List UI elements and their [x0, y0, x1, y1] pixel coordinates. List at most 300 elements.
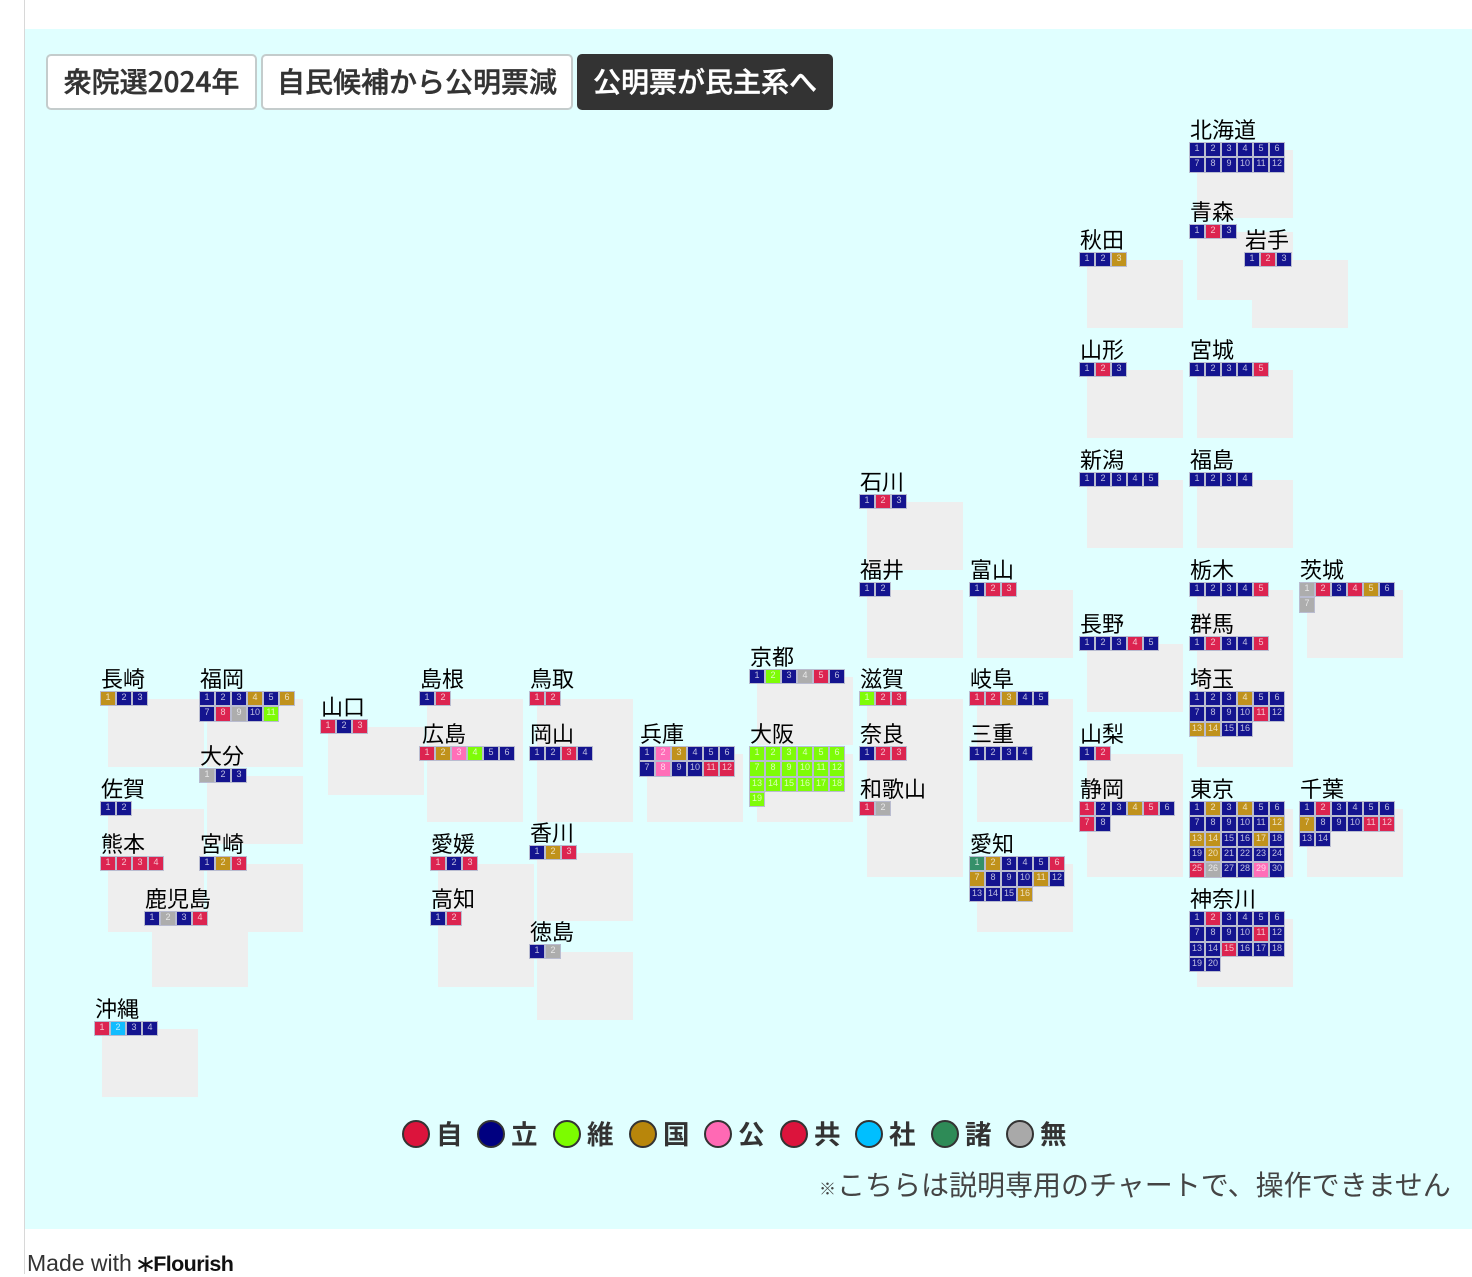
prefecture: 新潟: 3: [1116, 473, 1122, 483]
prefecture: 兵庫: 3: [676, 747, 682, 757]
prefecture: 滋賀: [859, 662, 963, 754]
prefecture: 京都: 5: [818, 670, 824, 680]
prefecture: 徳島: [529, 915, 633, 1020]
prefecture: 富山: 2: [990, 583, 996, 593]
prefecture: 神奈川: 15: [1224, 943, 1234, 953]
prefecture: 千葉: 4: [1352, 802, 1358, 812]
prefecture: 東京: 11: [1256, 817, 1266, 827]
prefecture: 東京: 23: [1256, 848, 1266, 858]
prefecture: 栃木: 2: [1210, 583, 1216, 593]
prefecture: 福岡: [199, 665, 303, 767]
prefecture: 兵庫: 5: [708, 747, 714, 757]
prefecture: 宮崎: 1: [204, 857, 210, 867]
legend: 国: 国: [663, 1113, 690, 1152]
prefecture: 茨城: 3: [1336, 583, 1342, 593]
prefecture: 福島: 4: [1242, 473, 1248, 483]
prefecture: 広島: 広島: [422, 717, 466, 749]
prefecture: 東京: 24: [1272, 848, 1282, 858]
prefecture: 北海道: 8: [1210, 158, 1216, 168]
prefecture: 大阪: 17: [816, 778, 826, 788]
prefecture: 岡山: 1: [534, 747, 540, 757]
prefecture: 福岡: 10: [250, 707, 260, 717]
prefecture: 北海道: 6: [1274, 143, 1280, 153]
prefecture: 秋田: 2: [1100, 253, 1106, 263]
prefecture: 神奈川: 18: [1272, 943, 1282, 953]
prefecture: 熊本: 3: [137, 857, 142, 867]
prefecture: 埼玉: 埼玉: [1190, 662, 1234, 694]
legend: 公: 公: [738, 1113, 764, 1152]
prefecture: 埼玉: 4: [1242, 692, 1248, 702]
prefecture: 大阪: 10: [800, 762, 810, 772]
prefecture: 福岡: 5: [268, 692, 274, 702]
prefecture: 岡山: 2: [550, 747, 556, 757]
prefecture: 東京: 18: [1272, 833, 1282, 843]
prefecture: 鹿児島: 鹿児島: [145, 882, 211, 914]
prefecture: 神奈川: 10: [1240, 927, 1250, 937]
prefecture: 埼玉: 7: [1194, 707, 1200, 717]
prefecture: 香川: 2: [550, 846, 556, 856]
prefecture: 神奈川: 9: [1226, 927, 1232, 937]
prefecture: 福島: 福島: [1190, 443, 1234, 475]
prefecture: 愛媛: 3: [467, 857, 472, 867]
prefecture: 群馬: 2: [1210, 637, 1216, 647]
prefecture: 群馬: 5: [1258, 637, 1264, 647]
prefecture: 神奈川: 7: [1194, 927, 1200, 937]
legend: 共: 共: [814, 1113, 840, 1152]
prefecture: 宮城: 4: [1242, 363, 1248, 373]
prefecture: 岡山: 3: [566, 747, 572, 757]
prefecture: 北海道: 1: [1194, 143, 1200, 153]
prefecture: 群馬: 3: [1226, 637, 1232, 647]
prefecture: 北海道: 2: [1210, 143, 1216, 153]
legend: 共: [780, 1120, 840, 1148]
prefecture: 静岡: 7: [1084, 817, 1090, 827]
prefecture: 岩手: 2: [1265, 253, 1270, 263]
prefecture: 北海道: [1189, 113, 1293, 218]
legend: 立: 立: [511, 1113, 538, 1152]
prefecture: 大阪: 19: [752, 793, 762, 803]
legend: 維: 維: [587, 1113, 614, 1152]
legend: 立: [477, 1120, 537, 1148]
prefecture: 宮崎: 宮崎: [200, 827, 244, 859]
prefecture: 島根: 1: [424, 692, 430, 702]
prefecture: 奈良: 3: [896, 747, 902, 757]
prefecture: 佐賀: 1: [105, 802, 110, 812]
prefecture: 静岡: 5: [1148, 802, 1154, 812]
prefecture: 東京: 25: [1192, 863, 1202, 873]
prefecture: 北海道: 7: [1194, 158, 1200, 168]
prefecture: 東京: 20: [1208, 848, 1218, 858]
prefecture: 奈良: 1: [864, 747, 870, 757]
prefecture: 茨城: 7: [1304, 598, 1310, 608]
prefecture: 宮城: 宮城: [1190, 333, 1234, 365]
prefecture: 北海道: 3: [1226, 143, 1232, 153]
prefecture: 山形: 3: [1116, 363, 1122, 373]
prefecture: 和歌山: [859, 772, 963, 877]
prefecture: 大阪: 12: [832, 762, 842, 772]
prefecture: 東京: 10: [1240, 817, 1250, 827]
prefecture: 秋田: [1079, 223, 1183, 328]
prefecture: 福岡: 7: [204, 707, 210, 717]
prefecture: 京都: 1: [754, 670, 760, 680]
prefecture: 宮崎: 2: [220, 857, 226, 867]
prefecture: 大分: [199, 742, 303, 844]
prefecture: 福島: 1: [1194, 473, 1200, 483]
prefecture: 岐阜: 2: [990, 692, 996, 702]
prefecture: 東京: 5: [1258, 802, 1264, 812]
prefecture: 神奈川: 3: [1226, 912, 1232, 922]
prefecture: 北海道: 4: [1242, 143, 1248, 153]
prefecture: 京都: 4: [802, 670, 808, 680]
prefecture: 三重: 2: [990, 747, 996, 757]
prefecture: 愛知: 16: [1020, 888, 1030, 898]
prefecture: 千葉: 7: [1304, 817, 1310, 827]
prefecture: 広島: 1: [424, 747, 430, 757]
prefecture: 神奈川: 11: [1256, 927, 1266, 937]
prefecture: 島根: [419, 662, 523, 754]
prefecture: 兵庫: 10: [690, 762, 700, 772]
prefecture: 栃木: 1: [1194, 583, 1200, 593]
prefecture: 広島: 2: [440, 747, 446, 757]
prefecture: 東京: 15: [1224, 833, 1234, 843]
prefecture: 沖縄: 1: [99, 1022, 104, 1032]
prefecture: 神奈川: 1: [1194, 912, 1200, 922]
prefecture: 香川: 香川: [530, 816, 574, 848]
prefecture: 神奈川: 20: [1208, 958, 1218, 968]
prefecture: 東京: 9: [1226, 817, 1232, 827]
prefecture: 大阪: 8: [770, 762, 776, 772]
prefecture: 石川: 3: [896, 495, 902, 505]
prefecture: 岡山: 岡山: [530, 717, 574, 749]
prefecture: 栃木: [1189, 553, 1293, 644]
prefecture: 千葉: 3: [1336, 802, 1342, 812]
prefecture: 茨城: 6: [1384, 583, 1390, 593]
prefecture: 愛媛: [430, 827, 534, 919]
prefecture: 愛知: 9: [1006, 872, 1012, 882]
prefecture: 山梨: 山梨: [1080, 717, 1124, 749]
prefecture: 広島: [419, 717, 523, 822]
prefecture: 大阪: 16: [800, 778, 810, 788]
prefecture: 茨城: [1299, 553, 1403, 658]
legend: 無: 無: [1040, 1113, 1066, 1152]
prefecture: 京都: [749, 640, 853, 745]
prefecture: 静岡: 8: [1100, 817, 1106, 827]
prefecture: 東京: 30: [1272, 863, 1282, 873]
prefecture: 新潟: 5: [1148, 473, 1154, 483]
prefecture: 千葉: 10: [1350, 817, 1360, 827]
prefecture: 東京: 21: [1224, 848, 1234, 858]
prefecture: 三重: 1: [974, 747, 980, 757]
prefecture: 徳島: 1: [534, 945, 540, 955]
prefecture: 三重: [969, 717, 1073, 822]
prefecture: 沖縄: 2: [115, 1022, 120, 1032]
prefecture: 群馬: 群馬: [1190, 607, 1234, 639]
prefecture: 京都: 3: [786, 670, 792, 680]
prefecture: 宮城: 2: [1210, 363, 1216, 373]
prefecture: 山口: 山口: [321, 690, 365, 722]
button: 衆院選2024年: [46, 54, 257, 110]
prefecture: 静岡: 4: [1132, 802, 1138, 812]
prefecture: 岩手: 3: [1281, 253, 1286, 263]
prefecture: 千葉: 5: [1368, 802, 1374, 812]
prefecture: 愛知: [969, 827, 1073, 932]
prefecture: 富山: 1: [974, 583, 980, 593]
prefecture: 静岡: 3: [1116, 802, 1122, 812]
prefecture: 岐阜: [969, 662, 1073, 754]
prefecture: 埼玉: 15: [1224, 723, 1234, 733]
prefecture: 千葉: 8: [1320, 817, 1326, 827]
prefecture: 愛知: 愛知: [970, 827, 1014, 859]
prefecture: 群馬: 4: [1242, 637, 1248, 647]
prefecture: 千葉: 千葉: [1300, 772, 1344, 804]
prefecture: 千葉: 12: [1382, 817, 1392, 827]
prefecture: 静岡: 静岡: [1080, 772, 1124, 804]
prefecture: 大阪: 3: [786, 747, 792, 757]
prefecture: 長崎: 1: [105, 692, 110, 702]
legend: 社: 社: [889, 1113, 916, 1152]
prefecture: 兵庫: 9: [676, 762, 682, 772]
prefecture: 長崎: 2: [121, 692, 126, 702]
prefecture: 東京: 1: [1194, 802, 1200, 812]
prefecture: 東京: 16: [1240, 833, 1250, 843]
prefecture: 大阪: 5: [818, 747, 824, 757]
prefecture: 山口: 2: [341, 720, 346, 730]
prefecture: 神奈川: 6: [1274, 912, 1280, 922]
prefecture: 兵庫: 2: [660, 747, 666, 757]
prefecture: 神奈川: [1189, 882, 1293, 987]
button: 公明票が民主系へ (active): 公明票が民主系へ: [593, 61, 817, 101]
prefecture: 福岡: 3: [236, 692, 242, 702]
prefecture: 宮城: 5: [1258, 363, 1264, 373]
prefecture: 北海道: 10: [1240, 158, 1250, 168]
prefecture: 北海道: 12: [1272, 158, 1282, 168]
prefecture: 石川: 2: [880, 495, 886, 505]
prefecture: 大阪: [749, 717, 853, 822]
prefecture: 愛知: 3: [1006, 857, 1012, 867]
prefecture: 福岡: 4: [252, 692, 258, 702]
prefecture: 長野: 1: [1084, 637, 1090, 647]
prefecture: 埼玉: 10: [1240, 707, 1250, 717]
prefecture: 長崎: [100, 662, 204, 767]
prefecture: 沖縄: 3: [131, 1022, 136, 1032]
prefecture: 神奈川: 神奈川: [1190, 882, 1256, 914]
prefecture: 大阪: 18: [832, 778, 842, 788]
prefecture: 岐阜: 岐阜: [970, 662, 1014, 694]
prefecture: 東京: 2: [1210, 802, 1216, 812]
prefecture: 長野: 長野: [1080, 607, 1124, 639]
prefecture: 山形: 2: [1100, 363, 1106, 373]
prefecture: 神奈川: 14: [1208, 943, 1218, 953]
footer: Made with Flourish: Made with Flourish: [27, 1250, 233, 1276]
prefecture: 熊本: [100, 830, 204, 932]
prefecture: 茨城: 2: [1320, 583, 1326, 593]
prefecture: 長崎: 長崎: [101, 662, 145, 694]
prefecture: 静岡: 1: [1084, 802, 1090, 812]
prefecture: 奈良: 奈良: [860, 717, 904, 749]
prefecture: 兵庫: 11: [706, 762, 716, 772]
prefecture: 愛知: 14: [988, 888, 998, 898]
prefecture: 愛知: 13: [972, 888, 982, 898]
legend: 公: [704, 1120, 764, 1148]
prefecture: 大阪: 14: [768, 778, 778, 788]
prefecture: 三重: 3: [1006, 747, 1012, 757]
prefecture: 奈良: 2: [880, 747, 886, 757]
prefecture: 兵庫: 12: [722, 762, 732, 772]
prefecture: 兵庫: 1: [644, 747, 650, 757]
prefecture: 青森: 1: [1194, 225, 1200, 235]
prefecture: 島根: 2: [440, 692, 446, 702]
prefecture: 愛知: 15: [1004, 888, 1014, 898]
prefecture: 愛知: 12: [1052, 872, 1062, 882]
prefecture: 三重: 三重: [970, 717, 1014, 749]
prefecture: 大阪: 1: [754, 747, 760, 757]
prefecture: 岩手: 岩手: [1245, 223, 1289, 255]
prefecture: 大阪: 大阪: [750, 717, 794, 749]
prefecture: 千葉: 9: [1336, 817, 1342, 827]
prefecture: 佐賀: 2: [121, 802, 126, 812]
prefecture: 千葉: 13: [1302, 833, 1312, 843]
prefecture: 埼玉: 12: [1272, 707, 1282, 717]
prefecture: 石川: [859, 465, 963, 570]
prefecture: 京都: 6: [834, 670, 840, 680]
prefecture: 福岡: 8: [220, 707, 226, 717]
prefecture: 大分: 3: [236, 769, 242, 779]
prefecture: 東京: 東京: [1190, 772, 1234, 804]
prefecture: 兵庫: 兵庫: [640, 717, 684, 749]
prefecture: 長野: 3: [1116, 637, 1122, 647]
prefecture: 栃木: 3: [1226, 583, 1232, 593]
prefecture: 東京: 4: [1242, 802, 1248, 812]
prefecture: 愛知: 7: [974, 872, 980, 882]
prefecture: 滋賀: 1: [864, 692, 870, 702]
prefecture: 鹿児島: 4: [197, 912, 202, 922]
legend: 国: [629, 1120, 689, 1148]
prefecture: 栃木: 栃木: [1190, 553, 1234, 585]
note text: ※こちらは説明専用のチャートで、操作できません: [819, 1164, 1451, 1204]
prefecture: 熊本: 熊本: [101, 827, 145, 859]
prefecture: 長崎: 3: [137, 692, 142, 702]
prefecture: 茨城: 4: [1352, 583, 1358, 593]
prefecture: 岐阜: 5: [1038, 692, 1044, 702]
prefecture: 広島: 3: [456, 747, 462, 757]
prefecture: 大分: 2: [220, 769, 226, 779]
prefecture: 愛知: 5: [1038, 857, 1044, 867]
prefecture: 三重: 4: [1022, 747, 1028, 757]
prefecture: 東京: 27: [1224, 863, 1234, 873]
button: 衆院選2024年: 衆院選2024年: [64, 61, 239, 101]
prefecture: 宮城: 3: [1226, 363, 1232, 373]
prefecture: 福岡: 2: [220, 692, 226, 702]
prefecture: 宮崎: 3: [236, 857, 242, 867]
prefecture: 岐阜: 3: [1006, 692, 1012, 702]
prefecture: 長野: 5: [1148, 637, 1154, 647]
prefecture: 埼玉: 8: [1210, 707, 1216, 717]
legend: 無: [1006, 1120, 1066, 1148]
prefecture: 埼玉: 1: [1194, 692, 1200, 702]
prefecture: 山形: 1: [1084, 363, 1090, 373]
prefecture: 京都: 京都: [750, 640, 794, 672]
prefecture: 福井: [859, 553, 963, 658]
prefecture: 兵庫: 6: [724, 747, 730, 757]
prefecture: 神奈川: 8: [1210, 927, 1216, 937]
prefecture: 福岡: 9: [236, 707, 242, 717]
prefecture: 埼玉: 16: [1240, 723, 1250, 733]
prefecture: 北海道: 9: [1226, 158, 1232, 168]
prefecture: 大阪: 15: [784, 778, 794, 788]
prefecture: 岡山: 4: [582, 747, 588, 757]
prefecture: 群馬: [1189, 607, 1293, 699]
prefecture: 岐阜: 1: [974, 692, 980, 702]
prefecture: 神奈川: 17: [1256, 943, 1266, 953]
legend: 社: [855, 1120, 915, 1148]
prefecture: 千葉: 2: [1320, 802, 1326, 812]
prefecture: 沖縄: 沖縄: [95, 992, 139, 1024]
prefecture: 新潟: 1: [1084, 473, 1090, 483]
button: 自民候補から公明票減: 自民候補から公明票減: [277, 61, 557, 101]
prefecture: 岩手: 1: [1249, 253, 1254, 263]
prefecture: 岡山: [529, 717, 633, 822]
prefecture: 高知: [430, 882, 534, 987]
prefecture: 神奈川: 12: [1272, 927, 1282, 937]
prefecture: 栃木: 4: [1242, 583, 1248, 593]
prefecture: 佐賀: [100, 775, 204, 877]
prefecture: 埼玉: 3: [1226, 692, 1232, 702]
prefecture: 静岡: [1079, 772, 1183, 877]
prefecture: 茨城: 1: [1304, 583, 1310, 593]
prefecture: 秋田: 秋田: [1080, 223, 1124, 255]
prefecture: 滋賀: 2: [880, 692, 886, 702]
prefecture: 大分: 大分: [200, 739, 244, 771]
prefecture: 奈良: [859, 717, 963, 809]
prefecture: 兵庫: 8: [660, 762, 666, 772]
prefecture: 山口: 3: [357, 720, 362, 730]
prefecture: 宮城: [1189, 333, 1293, 438]
prefecture: 大阪: 11: [816, 762, 826, 772]
prefecture: 大阪: 6: [834, 747, 840, 757]
prefecture: 富山: 富山: [970, 553, 1014, 585]
prefecture: 静岡: 6: [1164, 802, 1170, 812]
prefecture: 石川: 石川: [860, 465, 904, 497]
prefecture: 埼玉: 9: [1226, 707, 1232, 717]
prefecture: 香川: 1: [534, 846, 540, 856]
prefecture: 栃木: 5: [1258, 583, 1264, 593]
legend: 維: [553, 1120, 613, 1148]
prefecture: 広島: 5: [488, 747, 494, 757]
prefecture: 青森: [1189, 195, 1293, 300]
prefecture: 長野: [1079, 607, 1183, 712]
prefecture: 高知: 2: [451, 912, 456, 922]
prefecture: 東京: 7: [1194, 817, 1200, 827]
legend: 自: [402, 1120, 462, 1148]
prefecture: 福島: [1189, 443, 1293, 548]
button: 公明票が民主系へ (active): [577, 54, 833, 110]
prefecture: 千葉: 6: [1384, 802, 1390, 812]
prefecture: 東京: 29: [1256, 863, 1266, 873]
prefecture: 大阪: 2: [770, 747, 776, 757]
prefecture: 京都: 2: [770, 670, 776, 680]
prefecture: 埼玉: 6: [1274, 692, 1280, 702]
prefecture: 福井: 1: [864, 583, 870, 593]
prefecture: 神奈川: 4: [1242, 912, 1248, 922]
prefecture: 福井: 福井: [860, 553, 904, 585]
prefecture: 福岡: 福岡: [200, 662, 244, 694]
prefecture: 鳥取: [529, 662, 633, 754]
prefecture: 青森: 2: [1210, 225, 1216, 235]
prefecture: 愛知: 1: [974, 857, 980, 867]
prefecture: 埼玉: 14: [1208, 723, 1218, 733]
prefecture: 大阪: 13: [752, 778, 762, 788]
prefecture: 熊本: 2: [121, 857, 126, 867]
